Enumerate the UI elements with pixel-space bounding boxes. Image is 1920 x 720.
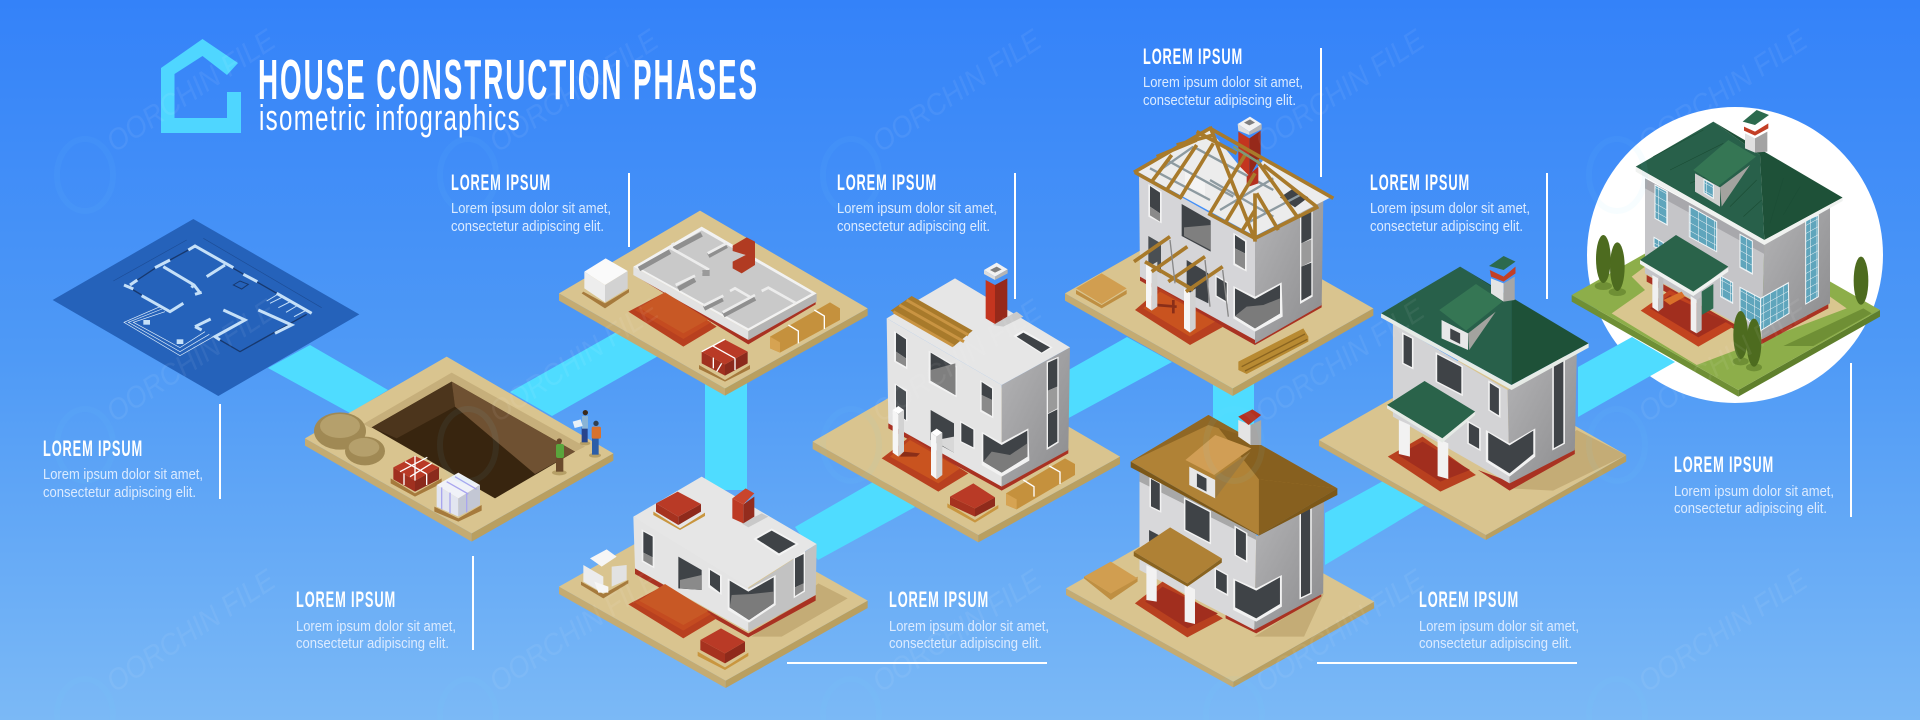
chimney <box>1238 409 1261 445</box>
white block pallet <box>582 258 629 308</box>
label: blueprint <box>43 404 221 501</box>
label: finished house <box>1674 363 1852 517</box>
label: blueprint: LOREM IPSUM <box>43 436 143 461</box>
house body <box>1645 178 1830 344</box>
label: brown roof: LOREM IPSUM <box>1419 587 1519 612</box>
orange tile stack <box>628 292 717 347</box>
porch columns <box>1146 262 1196 333</box>
porch <box>1640 235 1733 347</box>
phase 6: roof frame house <box>1065 117 1373 396</box>
label: green roof <box>1370 170 1548 299</box>
phase 4: concrete slab house <box>559 477 868 688</box>
label: slab house: Lorem ipsum dolor sit amet, <box>889 619 1049 635</box>
orange tile stack <box>628 584 717 638</box>
brick pallet <box>699 339 750 382</box>
label: slab house <box>787 587 1049 664</box>
label: excavation <box>296 556 474 652</box>
chimney <box>984 263 1023 327</box>
porch steps <box>882 437 968 492</box>
label: roof frame: LOREM IPSUM <box>1143 44 1243 69</box>
label: two storey shell: LOREM IPSUM <box>837 170 937 195</box>
label: finished house: consectetur adipiscing elit. <box>1674 501 1827 517</box>
roof deck <box>1137 130 1331 236</box>
label: foundation: consectetur adipiscing elit. <box>451 219 604 235</box>
house body <box>633 477 817 637</box>
brick chimney base <box>733 237 755 273</box>
connector: brown roof to green roof <box>1325 480 1425 565</box>
watermarks: OORCHIN FILE <box>867 563 1048 699</box>
windows <box>1654 185 1818 331</box>
chimney <box>1238 117 1262 177</box>
label: blueprint: consectetur adipiscing elit. <box>43 485 196 501</box>
watermarks: OORCHIN FILE <box>1250 563 1431 699</box>
label: two storey shell: Lorem ipsum dolor sit amet, <box>837 201 997 217</box>
timber stack <box>1006 458 1075 509</box>
label: green roof: consectetur adipiscing elit. <box>1370 219 1523 235</box>
timber on roof <box>891 296 973 347</box>
porch <box>1134 527 1223 637</box>
highlight circle behind finished house <box>1587 107 1883 403</box>
label: slab house: LOREM IPSUM <box>889 587 989 612</box>
label: green roof: LOREM IPSUM <box>1370 170 1470 195</box>
trees <box>1595 235 1868 371</box>
label: brown roof <box>1317 587 1579 664</box>
white block pallet <box>434 473 482 522</box>
watermarks: OORCHIN FILE <box>1250 293 1431 429</box>
watermarks: OORCHIN FILE <box>101 563 282 699</box>
watermarks: OORCHIN FILE <box>867 293 1048 429</box>
foundation walls <box>633 227 817 344</box>
brick pallet <box>391 456 442 497</box>
watermarks: OORCHIN FILE <box>101 23 282 159</box>
label: slab house: consectetur adipiscing elit. <box>889 636 1042 652</box>
green hip roof <box>1381 267 1589 390</box>
label: roof frame: Lorem ipsum dolor sit amet, <box>1143 75 1303 91</box>
connector: roof frame to brown roof <box>1213 380 1254 450</box>
label: finished house: LOREM IPSUM <box>1674 452 1774 477</box>
grey trusses <box>1150 147 1300 223</box>
phase 8: green roof house <box>1319 256 1626 540</box>
house body <box>887 278 1070 491</box>
label: foundation <box>451 170 630 247</box>
chimney <box>1743 110 1769 153</box>
log pile <box>1238 328 1308 374</box>
label: green roof: Lorem ipsum dolor sit amet, <box>1370 201 1530 217</box>
watermarks: OORCHIN FILE <box>484 293 665 429</box>
porch steps <box>1135 288 1223 345</box>
house body <box>1140 470 1324 633</box>
text: HOUSE CONSTRUCTION PHASES <box>258 48 759 112</box>
phase 3: foundation <box>559 211 868 396</box>
dormer <box>1185 435 1251 498</box>
connector: blueprint to pit <box>268 345 388 413</box>
chimney <box>1489 256 1515 302</box>
label: foundation: LOREM IPSUM <box>451 170 551 195</box>
label: excavation: LOREM IPSUM <box>296 587 396 612</box>
connector: slab to two storey shell <box>795 478 915 560</box>
brick pallet front <box>698 628 748 670</box>
label: excavation: Lorem ipsum dolor sit amet, <box>296 619 456 635</box>
phase 7: brown roof house <box>1066 409 1374 687</box>
connector: shell to roof frame <box>1065 337 1172 420</box>
brown hip roof <box>1131 415 1337 536</box>
watermarks: OORCHIN FILE <box>1633 563 1814 699</box>
inner wall faces <box>639 234 755 315</box>
green hip roof <box>1636 122 1843 245</box>
watermarks: OORCHIN FILE <box>484 563 665 699</box>
timber pallet <box>1084 562 1138 600</box>
label: brown roof: consectetur adipiscing elit. <box>1419 636 1572 652</box>
timber pallet <box>1076 273 1127 308</box>
phase 9: finished house <box>1572 110 1880 397</box>
house body <box>1139 173 1323 345</box>
brick pallet <box>947 483 998 523</box>
label: roof frame <box>1143 44 1322 177</box>
brick pallet on roof <box>653 492 705 530</box>
connector: pit to foundation <box>510 330 660 416</box>
watermarks: OORCHIN FILE <box>1633 23 1814 159</box>
phase 1: blueprint <box>53 219 359 396</box>
label: brown roof: Lorem ipsum dolor sit amet, <box>1419 619 1579 635</box>
connector: foundation to slab <box>705 380 747 490</box>
porch beams <box>1134 237 1223 292</box>
phase 5: two storey shell <box>813 263 1120 542</box>
label: foundation: Lorem ipsum dolor sit amet, <box>451 201 611 217</box>
dormer <box>1439 284 1502 350</box>
label: two storey shell <box>837 170 1016 299</box>
porch columns <box>893 406 942 479</box>
watermarks: OORCHIN FILE <box>101 293 282 429</box>
subtitle: isometric infographics <box>259 97 521 138</box>
logo icon: house outline <box>161 39 241 133</box>
label: finished house: Lorem ipsum dolor sit amet, <box>1674 484 1834 500</box>
chimney <box>732 488 754 523</box>
watermarks: OORCHIN FILE <box>1633 293 1814 429</box>
dormer <box>1693 140 1756 207</box>
label: roof frame: consectetur adipiscing elit. <box>1143 93 1296 109</box>
label: two storey shell: consectetur adipiscing elit. <box>837 219 990 235</box>
porch <box>1387 381 1476 492</box>
workers <box>552 410 601 475</box>
watermarks: OORCHIN FILE <box>1250 23 1431 159</box>
watermarks: OORCHIN FILE <box>867 23 1048 159</box>
watermarks: OORCHIN FILE <box>484 23 665 159</box>
connector: green roof to finished house <box>1578 337 1675 417</box>
label: blueprint: Lorem ipsum dolor sit amet, <box>43 467 203 483</box>
label: excavation: consectetur adipiscing elit. <box>296 636 449 652</box>
phase 2: excavation pit <box>305 357 613 542</box>
timber stack <box>770 302 840 353</box>
dirt piles <box>314 412 385 465</box>
white block pallet <box>581 549 628 598</box>
house body <box>1393 323 1577 491</box>
rafters <box>1134 127 1333 242</box>
